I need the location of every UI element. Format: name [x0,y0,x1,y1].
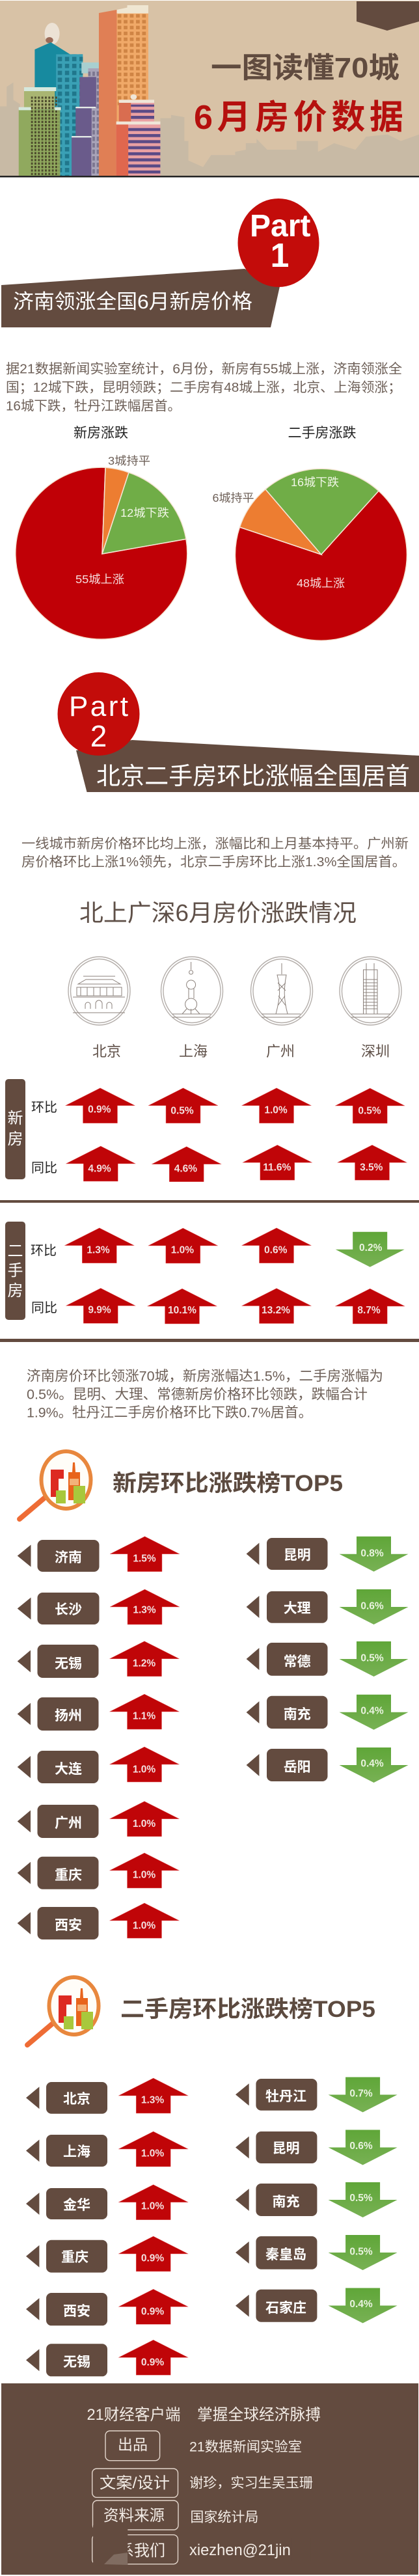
item: 北京: 1.3% [141,2094,164,2106]
intro paragraph 2: 一线城市新房价格环比均上涨，涨幅比和上月基本持平。广州新 [21,836,409,851]
item: 南充: 0.4% [360,1705,384,1717]
item: 大理 [247,1589,409,1624]
row label: year on year: 同比 [31,1300,57,1315]
arrow: Guangzhou 11.6%: 11.6% [263,1162,291,1173]
credit: contact: 联系我们 [103,2542,165,2560]
arrow: Shenzhen 0.5% [335,1088,405,1123]
part 1 heading: 济南领涨全国6月新房价格 [13,290,252,313]
item: 南充: 南充 [272,2195,299,2210]
part 2 heading: 北京二手房环比涨幅全国居首 [96,763,410,789]
arrow: Beijing 9.9% [66,1288,135,1323]
part 1 number: 1 [271,237,289,275]
item: 无锡: 1.2% [133,1658,155,1669]
item: 大理: 大理 [284,1601,311,1616]
item: 岳阳 [247,1747,409,1783]
arrow: Shanghai 10.1% [147,1289,217,1324]
panel: second-hand risers [26,2078,188,2376]
item: 无锡 [26,2340,188,2376]
item: 广州 [18,1802,180,1838]
intro paragraph 3 [27,1368,383,1420]
chart title: 二手房涨跌 [288,426,357,441]
arrow: Shanghai 4.6%: 4.6% [174,1164,197,1174]
side tab: second-hand homes: 手 [8,1262,23,1280]
item: 金华 [26,2185,188,2220]
item: 长沙 [18,1589,180,1624]
section header: part 1 [1,199,319,327]
intro paragraph 1: 据21数据新闻实验室统计，6月份，新房有55城上涨，济南领涨全 [6,362,403,376]
row label: month on month: 环比 [31,1243,57,1258]
item: 牡丹江: 牡丹江 [265,2089,306,2104]
item: 石家庄 [236,2288,398,2323]
item: 昆明: 0.6% [349,2141,373,2152]
item: 长沙: 1.3% [133,1605,156,1615]
item: 济南: 1.5% [133,1553,156,1565]
item: 石家庄: 石家庄 [265,2300,306,2316]
arrow: Shenzhen 0.2% [336,1232,405,1267]
item: 大连: 大连 [55,1762,82,1777]
part 2 banner [76,740,419,792]
panel: new home fallers [247,1537,409,1783]
item: 秦皇岛: 秦皇岛 [265,2247,306,2262]
city name labels: 北京 [92,1043,121,1060]
arrow: Shenzhen 8.7% [335,1289,405,1324]
item: 昆明: 0.8% [360,1548,384,1559]
item: 无锡 [18,1641,180,1678]
part 1 circle [238,199,319,287]
item: 昆明: 昆明 [284,1548,311,1563]
item: 无锡: 0.9% [141,2357,164,2368]
city name labels: 深圳 [361,1043,390,1060]
credit: copy and design: 文案/设计 [100,2474,170,2492]
side tab: new homes: 房 [8,1130,23,1148]
item: 南充: 0.5% [349,2193,373,2204]
panel: second-hand homes table [5,1222,405,1324]
arrow: Shenzhen 0.2%: 0.2% [359,1242,383,1254]
heading: new home ranking: 新房环比涨跌榜TOP5 [113,1471,343,1496]
icon: Shanghai Oriental Pearl [161,957,223,1025]
item: 大理: 0.6% [360,1601,384,1611]
item: 南充: 南充 [284,1707,311,1722]
item: 金华: 金华 [63,2197,90,2213]
city name labels [92,1043,390,1060]
arrow: Beijing 4.9% [66,1146,135,1181]
part 1 label: Part [250,209,310,243]
credit: producer: 出品 [118,2436,148,2453]
credit: copy and design: 谢珍，实习生吴玉珊 [189,2476,313,2491]
arrow: Beijing 0.9% [65,1088,135,1123]
row label: year on year: 同比 [31,1160,57,1175]
arrow: Shenzhen 0.5%: 0.5% [358,1105,381,1117]
item: 无锡: 无锡 [63,2355,90,2370]
item: 上海 [26,2131,188,2167]
arrow: Shanghai 1.0%: 1.0% [171,1244,194,1256]
item: 大连: 1.0% [133,1764,155,1775]
item: 南充 [236,2182,398,2217]
item: 西安: 西安 [55,1918,82,1933]
arrow: Guangzhou 13.2%: 13.2% [262,1305,290,1316]
item: 北京: 北京 [63,2091,90,2107]
item: 济南: 济南 [55,1550,82,1565]
section header: part 2 [57,672,419,792]
title line 2: 6月房价数据 [194,99,403,137]
side tab: second-hand homes [5,1222,25,1320]
item: 重庆: 重庆 [55,1867,82,1883]
pie chart: second-hand homes: 16城下跌 [291,476,339,489]
item: 常德: 0.5% [360,1653,384,1664]
pie chart: new homes: 12城下跌 [120,506,169,519]
arrow: Beijing 9.9%: 9.9% [88,1304,111,1316]
intro paragraph 1 [6,362,403,414]
item: 岳阳: 0.4% [360,1759,384,1769]
item: 昆明: 昆明 [272,2141,299,2156]
intro paragraph 3: 济南房价环比领涨70城，新房涨幅达1.5%，二手房涨幅为 [27,1368,383,1384]
credit: contact: xiezhen@21jin [189,2542,291,2559]
pie chart: new homes [16,426,187,639]
credit: data source: 国家统计局 [190,2510,258,2525]
item: 重庆 [26,2236,188,2273]
hero banner [0,1,419,177]
item: 无锡: 无锡 [55,1656,82,1671]
item: 西安: 1.0% [133,1920,155,1932]
arrow: Shanghai 10.1%: 10.1% [168,1305,196,1316]
intro paragraph 1: 国；12城下跌，昆明领跌；二手房有48城上涨，北京、上海领涨； [6,380,401,395]
item: 广州: 1.0% [133,1818,155,1829]
item: 西安 [18,1903,180,1939]
slice labels: 6城持平 [212,491,254,504]
item: 长沙: 长沙 [55,1602,82,1617]
intro paragraph 2: 房价格环比上涨1%领先，北京二手房环比上涨1.3%全国居首。 [21,855,406,870]
credit: data source: 资料来源 [103,2507,165,2525]
title line 1: 一图读懂70城 [211,52,399,84]
item: 扬州: 扬州 [55,1708,82,1723]
item: 常德: 常德 [284,1654,311,1669]
intro paragraph 2 [21,836,409,870]
arrow: Beijing 1.3% [64,1228,134,1263]
side tab: new homes [5,1079,25,1179]
part 2 number: 2 [90,719,107,753]
part 1 banner [1,269,280,327]
item: 重庆: 1.0% [133,1869,155,1881]
panel: second-hand fallers [236,2077,398,2323]
pie chart: second-hand homes: 48城上涨 [297,577,345,590]
item: 常德 [247,1641,409,1677]
item: 西安: 西安 [63,2304,90,2319]
item: 牡丹江 [236,2077,398,2113]
icon: magnifier over buildings [27,1977,99,2045]
item: 岳阳: 岳阳 [284,1760,311,1775]
arrow: Shenzhen 3.5%: 3.5% [360,1162,383,1173]
item: 秦皇岛: 0.5% [349,2247,373,2257]
footer slogan: 21财经客户端 [87,2406,181,2424]
item: 扬州: 1.1% [133,1710,155,1722]
item: 石家庄: 0.4% [349,2299,373,2310]
icon: Shenzhen tower [340,957,401,1025]
arrow: Guangzhou 0.6%: 0.6% [264,1244,288,1256]
city skyline illustration [0,5,419,176]
item: 广州: 广州 [55,1816,82,1831]
part 2 label: Part [69,691,128,722]
panel: new home risers [18,1537,180,1939]
item: 大连 [18,1747,180,1783]
item: 上海: 上海 [63,2144,90,2159]
item: 扬州 [18,1694,180,1731]
item: 北京 [26,2078,188,2114]
slice labels: 3城持平 [108,454,150,467]
item: 重庆 [18,1853,180,1889]
item: 秦皇岛 [236,2235,398,2270]
arrow: Guangzhou 1.0% [242,1088,311,1123]
item: 重庆: 0.9% [141,2253,164,2264]
arrow: Shanghai 1.0% [148,1228,218,1263]
intro paragraph 1: 16城下跌，牡丹江跌幅居首。 [6,398,181,414]
arrow: Guangzhou 0.6% [242,1228,311,1263]
item: 牡丹江: 0.7% [349,2088,373,2100]
item: 济南 [18,1537,180,1572]
item: 上海: 1.0% [141,2148,164,2159]
panel: new homes table [5,1079,407,1182]
side tab: second-hand homes: 二 [8,1242,23,1260]
item: 南充 [247,1695,409,1730]
icon: Beijing Tiananmen [68,957,130,1025]
arrow: Guangzhou 1.0%: 1.0% [264,1105,288,1116]
item: 金华: 1.0% [141,2201,164,2212]
side tab: second-hand homes: 房 [8,1282,23,1300]
arrow: Guangzhou 13.2% [242,1289,311,1324]
arrow: Shanghai 0.5% [148,1088,218,1123]
arrow: Shenzhen 8.7%: 8.7% [357,1305,381,1316]
arrow: Shanghai 4.6% [152,1147,221,1182]
icon: magnifier over buildings [20,1451,91,1519]
item: 西安 [26,2289,188,2325]
part 2 circle [57,672,139,756]
city name labels: 广州 [266,1043,295,1060]
credit: copy and design [92,2469,313,2497]
item: 昆明 [247,1537,409,1572]
arrow: Shenzhen 3.5% [337,1145,407,1180]
footer slogan: 掌握全球经济脉搏 [197,2406,321,2424]
row label: month on month: 环比 [31,1100,57,1115]
city name labels: 上海 [179,1043,208,1060]
intro paragraph 3: 1.9%。牡丹江二手房价格环比下跌0.7%居首。 [27,1404,312,1420]
corner ribbon [357,1,419,31]
credit: contact [92,2525,311,2566]
credit: producer [105,2431,302,2461]
pie chart: second-hand homes [212,426,407,640]
arrow: Shanghai 0.5%: 0.5% [170,1105,194,1117]
arrow: Beijing 1.3%: 1.3% [87,1244,110,1256]
panel: footer credits [1,2383,418,2575]
icon: Guangzhou Canton Tower [251,957,312,1025]
item: 重庆: 重庆 [61,2249,88,2265]
side tab: new homes: 新 [8,1110,23,1127]
arrow: Guangzhou 11.6% [243,1145,312,1180]
arrow: Beijing 4.9%: 4.9% [88,1164,111,1174]
credit: producer: 21数据新闻实验室 [189,2439,302,2455]
footer slogan [87,2406,321,2424]
item: 昆明 [236,2130,398,2165]
heading: first-tier cities: 北上广深6月房价涨跌情况 [79,899,357,926]
credit: data source [92,2501,258,2530]
heading: second-hand ranking: 二手房环比涨跌榜TOP5 [120,1997,375,2022]
intro paragraph 3: 0.5%。昆明、大理、常德新房价格环比领跌，跌幅合计 [27,1386,368,1402]
arrow: Beijing 0.9%: 0.9% [88,1104,111,1116]
item: 西安: 0.9% [141,2307,164,2317]
pie chart: new homes: 55城上涨 [75,573,124,586]
chart title: 新房涨跌 [74,426,128,441]
